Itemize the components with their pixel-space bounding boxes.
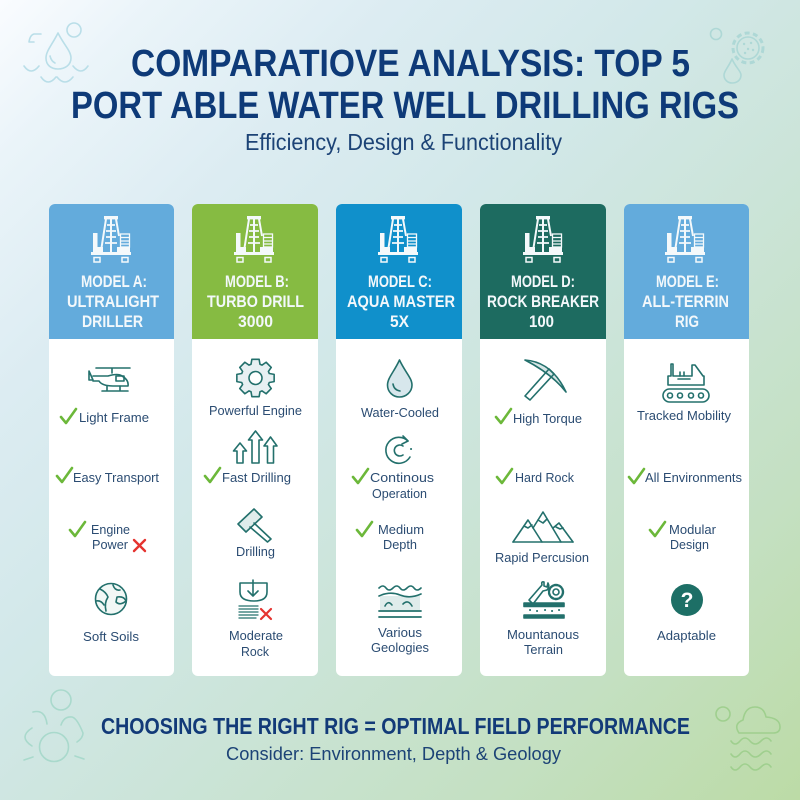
header: Model B: 3000	[238, 313, 273, 331]
icon: question mark	[671, 584, 703, 616]
header: Model B: MODEL B:	[225, 273, 289, 291]
feature: Engine Power: Power	[92, 537, 129, 552]
header: Model C: AQUA MASTER	[347, 293, 455, 311]
header: Model D: MODEL D:	[511, 273, 575, 291]
header: Model C	[336, 204, 462, 339]
feature: Fast Drilling: Fast Drilling	[222, 470, 291, 485]
header: Model D: ROCK BREAKER	[487, 293, 599, 311]
feature: Medium Depth	[357, 522, 424, 552]
label: Rapid Percusion: Rapid Percusion	[495, 550, 589, 565]
feature: Easy Transport: Easy Transport	[73, 470, 159, 485]
decoration: top-right gear and drop	[710, 28, 763, 83]
icon: helicopter	[89, 368, 130, 391]
header: Model A: DRILLER	[82, 313, 143, 331]
icon: pickaxe	[525, 360, 566, 400]
icon: mountains	[513, 512, 573, 542]
icon: up arrows	[234, 431, 277, 463]
label: Water-Cooled: Water-Cooled	[361, 405, 439, 420]
icon: hammer	[238, 509, 271, 542]
icon: gear	[237, 359, 274, 397]
header: Model B: TURBO DRILL	[207, 293, 304, 311]
subtitle: Efficiency, Design & Functionality	[245, 129, 562, 155]
feature: Light Frame: Light Frame	[79, 410, 149, 425]
label: Powerful Engine: Powerful Engine	[209, 403, 302, 418]
icon: tracked vehicle	[663, 364, 709, 402]
icon: continuous cycle	[386, 436, 411, 463]
feature: Continous Operation: Continous	[370, 470, 435, 485]
icon: geology layers	[379, 586, 421, 617]
label: Mountanous Terrain	[507, 627, 579, 657]
header: Model A: ULTRALIGHT	[67, 293, 159, 311]
header: Model D	[480, 204, 606, 339]
feature: Engine Power	[70, 522, 145, 552]
header: Model A: MODEL A:	[81, 273, 147, 291]
header: Model E	[624, 204, 749, 339]
panel: Model A	[49, 204, 174, 676]
label: Mountanous Terrain: Mountanous	[507, 627, 579, 642]
decoration: bottom-right cloud and waves	[716, 707, 780, 770]
label: Various Geologies: Geologies	[371, 640, 429, 655]
label: Moderate Rock	[229, 628, 283, 659]
label: Various Geologies	[371, 625, 429, 655]
header: Model B	[192, 204, 318, 339]
panel: Model D	[480, 204, 606, 676]
feature: Medium Depth: Depth	[383, 537, 417, 552]
label: Drilling: Drilling	[236, 544, 275, 559]
footer subtext: Consider: Environment, Depth & Geology	[226, 743, 562, 764]
header: Model C: MODEL C:	[368, 273, 432, 291]
feature: Engine Power: Engine	[91, 522, 130, 537]
label: Moderate Rock: Moderate	[229, 628, 283, 643]
decoration: top-left water drop	[24, 23, 88, 82]
header: Model E: RIG	[675, 313, 699, 331]
feature: Continous Operation: Operation	[372, 486, 427, 501]
feature: High Torque: High Torque	[513, 411, 582, 426]
feature: Medium Depth: Medium	[378, 522, 424, 537]
header: Model D: 100	[529, 313, 554, 331]
icon: water drop	[388, 360, 412, 397]
footer headline: CHOOSING THE RIGHT RIG = OPTIMAL FIELD PERFORMANCE	[101, 713, 690, 739]
feature: Modular Design: Design	[670, 537, 709, 552]
label: Mountanous Terrain: Terrain	[524, 642, 563, 657]
panel: Model C	[336, 204, 462, 676]
title: COMPARATIOVE ANALYSIS: TOP 5	[131, 43, 690, 85]
title	[71, 43, 739, 127]
header: Model E: ALL-TERRIN	[642, 293, 729, 311]
label: Tracked Mobility: Tracked Mobility	[637, 408, 731, 423]
icon: globe	[96, 584, 126, 614]
header: Model A	[49, 204, 174, 339]
feature: Hard Rock: Hard Rock	[515, 470, 574, 485]
icon: moderate rock	[239, 580, 271, 619]
label: Moderate Rock: Rock	[241, 644, 269, 659]
decoration: bottom-left circles	[24, 690, 84, 762]
icon: question mark: ?	[681, 589, 693, 612]
feature: Continous Operation	[353, 469, 435, 501]
header: Model C: 5X	[390, 313, 409, 331]
feature: All Environments: All Environments	[645, 470, 742, 485]
label: Soft Soils: Soft Soils	[83, 629, 140, 644]
panel: Model B	[192, 204, 318, 676]
feature: Modular Design: Modular	[669, 522, 717, 537]
label: Various Geologies: Various	[378, 625, 422, 640]
panel: Model E	[624, 204, 749, 676]
label: Adaptable: Adaptable	[657, 628, 716, 643]
header: Model E: MODEL E:	[656, 273, 719, 291]
icon: wrench, gear and terrain	[524, 582, 564, 618]
feature: Modular Design	[650, 522, 717, 552]
